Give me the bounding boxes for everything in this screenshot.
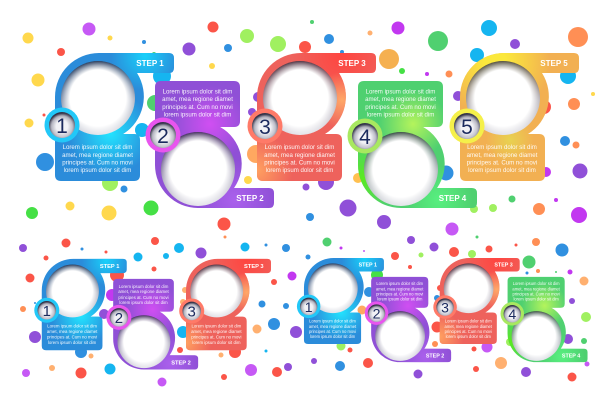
step 2 panel	[146, 81, 274, 208]
step 4 panel: amet, mea regione diamet	[365, 96, 436, 103]
small step 2 panel: Lorem ipsum dolor sit dim	[119, 284, 169, 289]
step 3 panel: amet, mea regione diamet	[264, 152, 335, 159]
small step 3 panel: amet, mea regione diamet	[445, 324, 493, 329]
small step 1 panel: principes at. Cum no movi	[47, 334, 97, 339]
small step 1 panel: STEP 1	[100, 264, 120, 270]
bottom left: three step infographic	[34, 259, 271, 370]
step 5 panel: lorem ipsum dolor sit dim	[468, 167, 536, 174]
small step 2 panel: Lorem ipsum dolor sit dim	[376, 281, 424, 286]
step 2 panel: lorem ipsum dolor sit dim	[164, 112, 231, 118]
small step 4 panel: 4	[508, 306, 516, 322]
step 2 panel: amet, mea regione diamet	[162, 96, 233, 103]
small step 1 panel: lorem ipsum dolor sit dim	[48, 340, 97, 345]
small step 1 panel: Lorem ipsum dolor sit dim	[309, 319, 356, 324]
small step 4 panel: STEP 4	[562, 353, 580, 359]
step 5 panel: 5	[461, 116, 473, 139]
small step 1 panel: amet, mea regione diamet	[47, 329, 98, 334]
step 1 panel: amet, mea regione diamet	[62, 152, 133, 159]
step 2 panel: STEP 2	[236, 194, 264, 203]
step 4 panel: lorem ipsum dolor sit dim	[367, 112, 434, 118]
small step 3 panel	[433, 258, 520, 344]
step 1 panel: STEP 1	[136, 59, 164, 68]
small step 4 panel: Lorem ipsum dolor sit dim	[513, 281, 560, 286]
step 5 panel: amet, mea regione diamet	[467, 152, 538, 159]
step 1 panel: Lorem ipsum dolor sit dim	[63, 144, 132, 151]
small step 2 panel: lorem ipsum dolor sit dim	[119, 300, 168, 305]
small step 1 panel: 1	[43, 303, 51, 320]
small step 2 panel: lorem ipsum dolor sit dim	[377, 297, 423, 302]
step 3 panel	[248, 53, 376, 181]
small step 1 panel: Lorem ipsum dolor sit dim	[47, 323, 97, 328]
small step 2 panel: STEP 2	[171, 361, 191, 367]
small step 1 panel: lorem ipsum dolor sit dim	[310, 334, 356, 339]
step 3 panel: Lorem ipsum dolor sit dim	[265, 144, 334, 151]
step 5 panel: STEP 5	[540, 59, 568, 68]
step 4 panel: 4	[359, 126, 371, 149]
step 2 panel: principes at. Cum no movi	[162, 104, 233, 111]
step 5 panel	[450, 53, 579, 181]
step 3 panel: lorem ipsum dolor sit dim	[266, 167, 333, 174]
step 2 panel: Lorem ipsum dolor sit dim	[163, 88, 232, 96]
small step 2 panel	[365, 277, 451, 362]
small step 3 panel: principes at. Cum no movi	[445, 329, 492, 334]
step 3 panel: 3	[259, 116, 271, 139]
step 1 panel: principes at. Cum no movi	[62, 160, 133, 166]
small step 2 panel: 2	[373, 305, 381, 321]
small step 3 panel	[179, 259, 271, 350]
small step 1 panel: 1	[305, 299, 313, 315]
small step 2 panel: 2	[115, 310, 123, 327]
step 3 panel: principes at. Cum no movi	[264, 160, 335, 166]
step 4 panel: STEP 4	[439, 194, 467, 203]
step 2 panel: 2	[157, 125, 169, 148]
step 5 panel: principes at. Cum no movi	[467, 160, 537, 166]
step 1 panel: lorem ipsum dolor sit dim	[64, 167, 131, 174]
step 4 panel	[348, 81, 477, 208]
small step 3 panel: lorem ipsum dolor sit dim	[192, 340, 241, 345]
small step 2 panel: principes at. Cum no movi	[118, 295, 169, 300]
small step 3 panel: STEP 3	[244, 264, 264, 270]
small step 4 panel: lorem ipsum dolor sit dim	[513, 297, 559, 302]
small step 3 panel: STEP 3	[494, 263, 513, 269]
step 4 panel: principes at. Cum no movi	[365, 104, 436, 111]
step 1 panel: 1	[56, 115, 68, 138]
small step 1 panel: STEP 1	[359, 263, 377, 269]
small step 3 panel: amet, mea regione diamet	[191, 329, 242, 334]
small step 1 panel	[34, 259, 127, 350]
small step 3 panel: 3	[441, 299, 449, 315]
small step 3 panel: Lorem ipsum dolor sit dim	[191, 323, 242, 328]
step 1 panel	[44, 53, 174, 181]
small step 3 panel: Lorem ipsum dolor sit dim	[445, 319, 492, 324]
small step 1 panel: principes at. Cum no movi	[309, 329, 356, 334]
step 4 panel: Lorem ipsum dolor sit dim	[366, 88, 435, 96]
small step 2 panel: amet, mea regione diamet	[118, 289, 170, 294]
top row: five step infographic	[44, 53, 579, 208]
small step 4 panel: principes at. Cum no movi	[513, 292, 560, 297]
small step 3 panel: principes at. Cum no movi	[191, 334, 241, 339]
small step 4 panel: amet, mea regione diamet	[512, 286, 561, 291]
step 5 panel: Lorem ipsum dolor sit dim	[467, 144, 537, 151]
bottom right: four step infographic	[297, 258, 588, 362]
small step 2 panel: amet, mea regione diamet	[376, 286, 424, 291]
small step 2 panel	[106, 279, 198, 370]
step 3 panel: STEP 3	[338, 59, 366, 68]
small step 2 panel: STEP 2	[426, 353, 444, 359]
small step 2 panel: principes at. Cum no movi	[376, 292, 423, 297]
small step 3 panel: lorem ipsum dolor sit dim	[446, 334, 492, 339]
small step 1 panel	[297, 258, 384, 344]
small step 1 panel: amet, mea regione diamet	[309, 324, 357, 329]
small step 4 panel	[501, 277, 588, 362]
small step 3 panel: 3	[188, 304, 196, 321]
